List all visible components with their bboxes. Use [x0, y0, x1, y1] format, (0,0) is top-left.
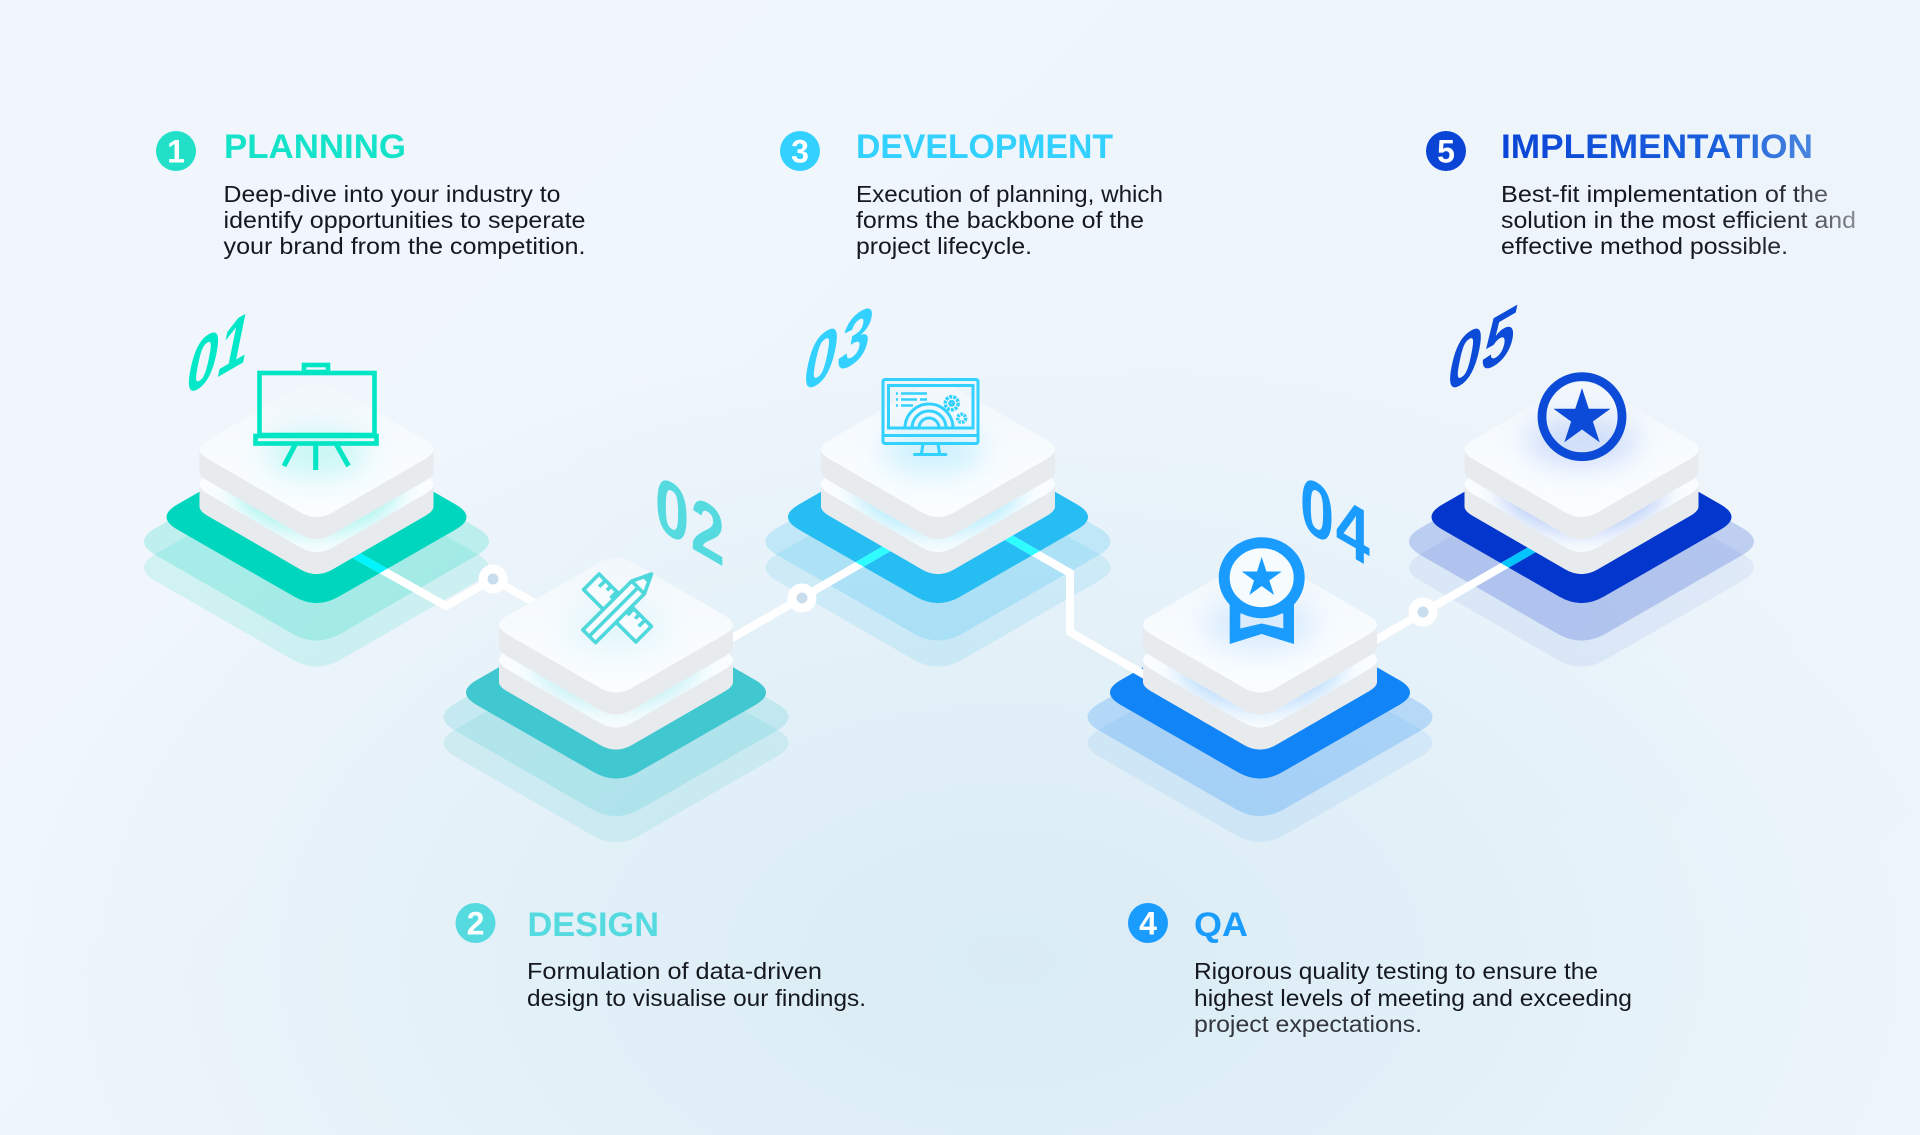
text block: step 4 qa: project expectations. — [1194, 1011, 1422, 1037]
text block: step 3 development: 3 — [791, 134, 809, 170]
icon: award ribbon medal — [1224, 543, 1299, 644]
text block: step 3 development: project lifecycle. — [856, 233, 1032, 259]
text block: step 3 development — [780, 128, 1163, 259]
text block: step 4 qa — [1128, 903, 1632, 1037]
text block: step 1 planning: identify opportunities to seperate — [224, 207, 586, 233]
text block: step 5 implementation: IMPLEMENTATION — [1501, 128, 1813, 166]
text block: step 2 design: Formulation of data-driven — [527, 958, 822, 984]
stacked slabs: step 4 — [1143, 557, 1377, 750]
text block: step 2 design: DESIGN — [528, 906, 659, 944]
text block: step 5 implementation: solution in the most efficient and — [1501, 207, 1856, 233]
icon: presentation easel — [256, 365, 376, 470]
stacked slabs: step 3 — [821, 405, 1055, 574]
text block: step 1 planning: PLANNING — [224, 128, 406, 166]
stacked slabs: step 1 — [200, 424, 434, 574]
icon: star in circle — [1542, 377, 1622, 457]
connector line from step 1 to step 2 — [350, 552, 540, 606]
platform base: step 5 — [1409, 431, 1754, 667]
text block: step 3 development: forms the backbone of the — [856, 207, 1144, 233]
text block: step 1 planning — [156, 128, 586, 259]
text block: step 3 development: Execution of planning, which — [856, 181, 1163, 207]
platform base: step 2 — [444, 606, 788, 842]
connector node 2-3 — [792, 588, 812, 608]
text block: step 4 qa: Rigorous quality testing to ensure the — [1194, 958, 1598, 984]
number 05: 05 — [1441, 284, 1527, 411]
stacked slabs: step 5 — [1464, 415, 1698, 574]
connector line from step 4 to step 5 — [1377, 548, 1536, 644]
icon: monitor with gears — [883, 380, 978, 454]
icon: crossed ruler and pencil — [583, 568, 658, 643]
connector line from step 3 to step 4 — [1004, 536, 1143, 678]
number 01: 01 — [179, 291, 260, 414]
text block: step 5 implementation: Best-fit implementation of the — [1501, 181, 1828, 207]
number 04: 04 — [1300, 457, 1371, 585]
text block: step 2 design — [456, 903, 866, 1011]
platform base: step 3 — [766, 431, 1110, 667]
text block: step 5 implementation: effective method possible. — [1501, 233, 1788, 259]
platform base: step 1 — [144, 431, 489, 667]
text block: step 1 planning: 1 — [167, 134, 185, 170]
text block: step 2 design: design to visualise our findings. — [527, 985, 866, 1011]
connector node 4-5 — [1413, 602, 1433, 622]
text block: step 4 qa: 4 — [1139, 906, 1157, 942]
text block: step 1 planning: Deep-dive into your industry to — [224, 181, 560, 207]
number 03: 03 — [797, 284, 883, 411]
number 02: 02 — [655, 457, 726, 585]
text block: step 4 qa: highest levels of meeting and exceeding — [1194, 985, 1632, 1011]
text block: step 5 implementation — [1426, 128, 1856, 259]
text block: step 4 qa: QA — [1194, 906, 1248, 944]
connector node 1-2 — [483, 569, 503, 589]
text block: step 3 development: DEVELOPMENT — [856, 128, 1113, 166]
connector line from step 2 to step 3 — [733, 546, 890, 642]
text block: step 5 implementation: 5 — [1437, 134, 1455, 170]
text block: step 1 planning: your brand from the competition. — [224, 233, 586, 259]
platform base: step 4 — [1088, 606, 1432, 842]
text block: step 2 design: 2 — [467, 906, 484, 942]
stacked slabs: step 2 — [499, 557, 733, 750]
